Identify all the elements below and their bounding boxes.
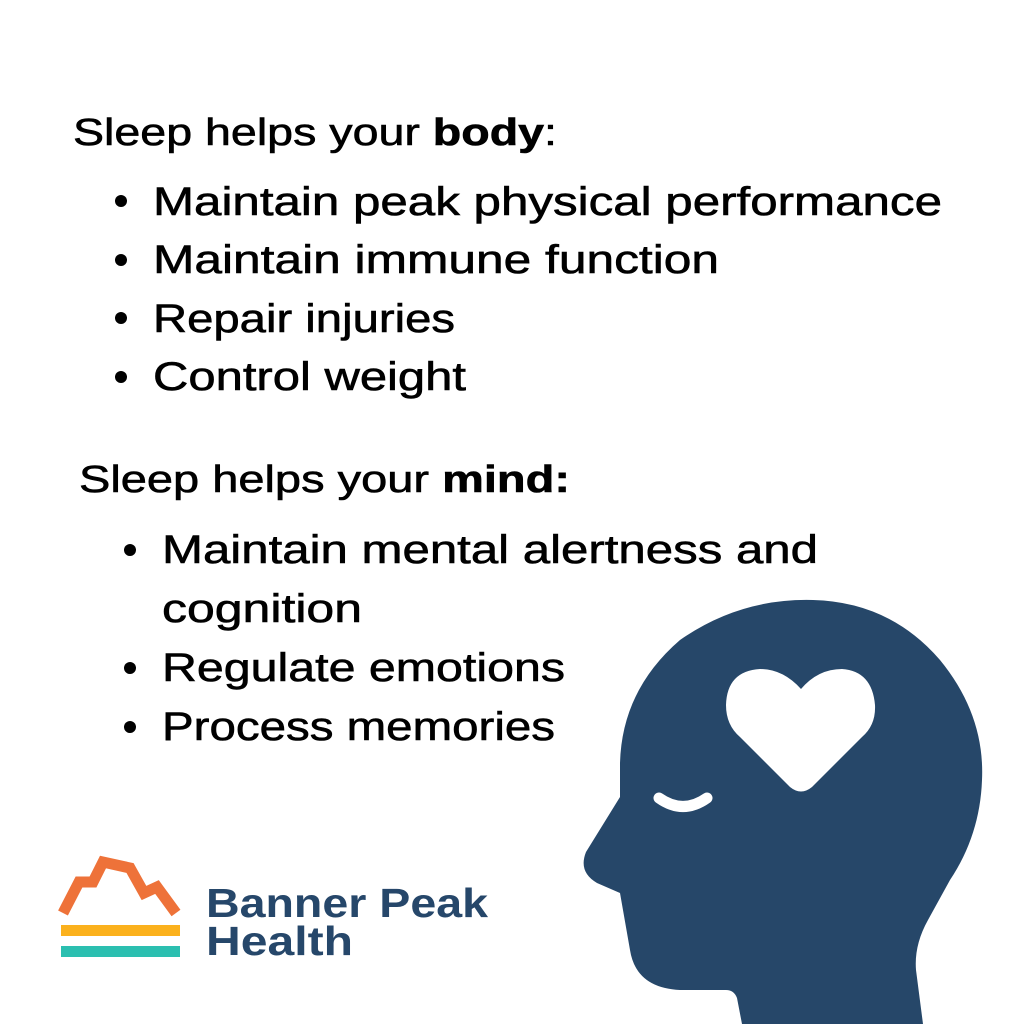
list: body benefits: Control weight [153,355,466,399]
list: mind benefits: Process memories [162,705,555,749]
logo: Banner Peak Health: Health [206,918,353,964]
list: body benefits: Maintain peak physical performance [153,180,942,224]
list: mind benefits: Maintain mental alertness and [162,528,818,572]
icon: closed eye [659,798,707,806]
heading: mind: Sleep helps your mind: [79,459,570,501]
list: body benefits [115,180,942,399]
list: mind benefits [124,528,818,749]
list: body benefits: Repair injuries [153,297,455,341]
list: body benefits: Maintain immune function [153,238,719,282]
logo: Banner Peak Health [61,862,488,964]
list: mind benefits: cognition [162,587,362,631]
heading: body: Sleep helps your body : [73,112,557,154]
logo: Banner Peak Health: Banner Peak [206,880,488,926]
icon: head with heart [584,600,982,1024]
icon: heart [726,669,875,792]
list: mind benefits: Regulate emotions [162,646,565,690]
